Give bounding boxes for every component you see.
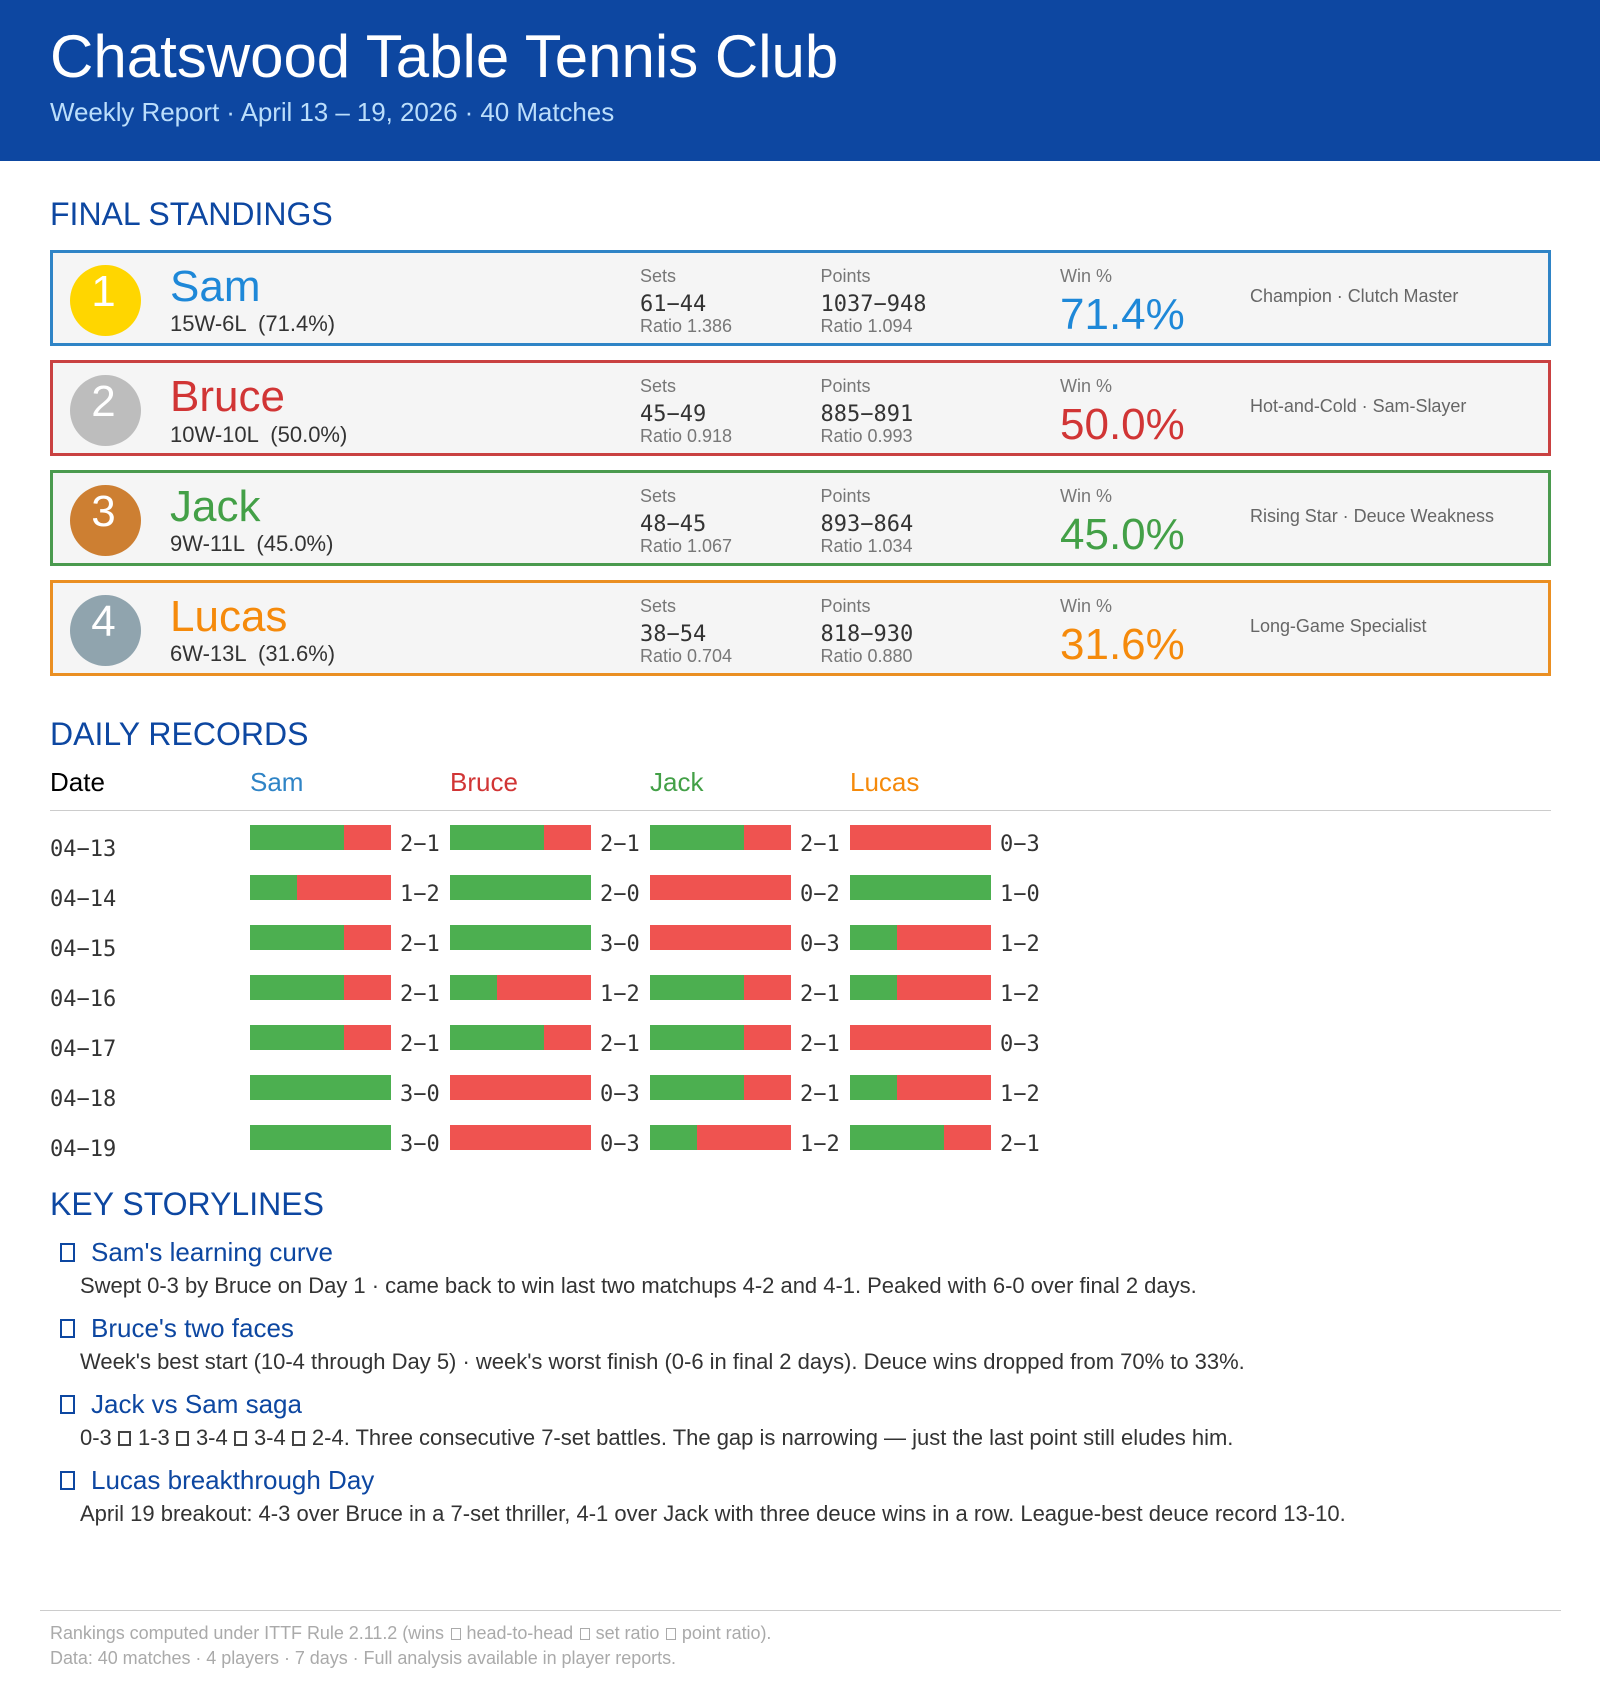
icon: rank 2 medal: 2 [91, 376, 116, 426]
sets stat: Sets [640, 376, 676, 396]
row 04-13: 2−1 [400, 832, 440, 857]
sets stat: Sets [640, 266, 676, 286]
table header: Bruce [450, 767, 518, 797]
panel: Sam standing card [50, 250, 1551, 346]
icon: rank 2 medal [70, 375, 141, 446]
row 04-16: 2−1 [800, 982, 840, 1007]
row 04-15: 2−1 [400, 932, 440, 957]
row 04-16 [50, 975, 1040, 1012]
panel: Jack standing card [50, 470, 1551, 566]
panel: Sam standing card: Ratio 1.386 [640, 316, 732, 336]
tagline: Hot-and-Cold · Sam-Slayer [1250, 396, 1466, 416]
row 04-16: 1−2 [1000, 982, 1040, 1007]
panel: Bruce standing card: 45−49 [640, 402, 706, 427]
heading: daily records: DAILY RECORDS [50, 716, 308, 752]
panel: Jack standing card: Ratio 1.034 [820, 536, 913, 556]
row 04-13: 2−1 [600, 832, 640, 857]
storyline: Lucas breakthrough Day: April 19 breakout: 4-3 over Bruce in a 7-set thriller, 4-1 over Jack with three deuce wins in a row. League-best deuce record 13-10. [80, 1501, 1346, 1526]
panel: Jack standing card: 48−45 [640, 512, 706, 537]
win percent: Win % [1060, 596, 1112, 616]
tagline: Champion · Clutch Master [1250, 286, 1458, 306]
heading: key storylines: KEY STORYLINES [50, 1186, 324, 1222]
storyline: Bruce's two faces: Bruce's two faces [91, 1313, 294, 1343]
footer: Data: 40 matches · 4 players · 7 days · Full analysis available in player reports. [50, 1648, 676, 1668]
footer [40, 1610, 1561, 1681]
row 04-14: 1−2 [400, 882, 440, 907]
row 04-15: 3−0 [600, 932, 640, 957]
table header: Jack [650, 767, 703, 797]
row 04-17: 0−3 [1000, 1032, 1040, 1057]
row 04-14: 2−0 [600, 882, 640, 907]
panel: Lucas standing card: Ratio 0.704 [640, 646, 732, 666]
row 04-14: 1−0 [1000, 882, 1040, 907]
row 04-18: 2−1 [800, 1082, 840, 1107]
player name: Sam [170, 262, 260, 311]
panel: Bruce standing card [50, 360, 1551, 456]
storyline: Sam's learning curve: Swept 0-3 by Bruce on Day 1 · came back to win last two matchups 4-2 and 4-1. Peaked with 6-0 over final 2 days. [80, 1273, 1197, 1298]
footer: Rankings computed under ITTF Rule 2.11.2 (wins head-to-head set ratio point ratio). [50, 1623, 771, 1643]
table header [50, 767, 1551, 811]
icon: rank 1 medal: 1 [91, 266, 116, 316]
row 04-18: 1−2 [1000, 1082, 1040, 1107]
panel: Lucas standing card: 38−54 [640, 622, 706, 647]
row 04-14: 04−14 [50, 887, 116, 912]
record: 6W-13L (31.6%) [170, 641, 335, 666]
panel: Sam standing card: 71.4% [1060, 290, 1185, 339]
record: 9W-11L (45.0%) [170, 531, 333, 556]
row 04-13: 2−1 [800, 832, 840, 857]
win percent: Win % [1060, 376, 1112, 396]
row 04-18 [50, 1075, 1040, 1112]
table header: Lucas [850, 767, 919, 797]
row 04-17: 2−1 [600, 1032, 640, 1057]
storyline: Jack vs Sam saga: 0-3 1-3 3-4 3-4 2-4. Three consecutive 7-set battles. The gap is narrowing — just the last point still eludes him. [80, 1425, 1233, 1450]
panel: Bruce standing card: Ratio 0.993 [820, 426, 913, 446]
title: Chatswood Table Tennis Club [50, 23, 838, 90]
panel: Sam standing card: Ratio 1.094 [820, 316, 913, 336]
row 04-18: 3−0 [400, 1082, 440, 1107]
row 04-19: 1−2 [800, 1132, 840, 1157]
player name: Lucas [170, 592, 287, 641]
storyline: Sam's learning curve: Sam's learning curve [91, 1237, 333, 1267]
chart: daily records bars [50, 825, 1040, 1162]
row 04-17: 04−17 [50, 1037, 116, 1062]
row 04-14: 0−2 [800, 882, 840, 907]
points stat: Points [820, 596, 871, 616]
icon: rank 4 medal: 4 [91, 596, 116, 646]
icon: rank 3 medal: 3 [91, 486, 116, 536]
points stat: Points [820, 486, 871, 506]
record: 15W-6L (71.4%) [170, 311, 335, 336]
row 04-13: 0−3 [1000, 832, 1040, 857]
win percent: Win % [1060, 266, 1112, 286]
row 04-19: 3−0 [400, 1132, 440, 1157]
row 04-16: 1−2 [600, 982, 640, 1007]
icon: rank 3 medal [70, 485, 141, 556]
points stat: Points [820, 376, 871, 396]
row 04-19: 0−3 [600, 1132, 640, 1157]
row 04-16: 2−1 [400, 982, 440, 1007]
row 04-19 [50, 1125, 1040, 1162]
win percent: Win % [1060, 486, 1112, 506]
storyline: Sam's learning curve [60, 1237, 1197, 1298]
panel: Lucas standing card: 31.6% [1060, 620, 1185, 669]
storyline: Bruce's two faces: Week's best start (10-4 through Day 5) · week's worst finish (0-6 in final 2 days). Deuce wins dropped from 70% to 33%. [80, 1349, 1245, 1374]
row 04-14 [50, 875, 1040, 912]
panel: Sam standing card: 61−44 [640, 292, 706, 317]
row 04-17: 2−1 [800, 1032, 840, 1057]
panel: Sam standing card: 1037−948 [820, 292, 926, 317]
player name: Bruce [170, 372, 285, 421]
storyline: Lucas breakthrough Day: Lucas breakthrough Day [91, 1465, 374, 1495]
row 04-17: 2−1 [400, 1032, 440, 1057]
row 04-16: 04−16 [50, 987, 116, 1012]
header banner [0, 0, 1600, 161]
panel: Lucas standing card: Ratio 0.880 [820, 646, 913, 666]
player name: Jack [170, 482, 260, 531]
sets stat: Sets [640, 486, 676, 506]
panel: Jack standing card: Ratio 1.067 [640, 536, 732, 556]
storyline: Jack vs Sam saga [60, 1389, 1233, 1450]
icon: rank 1 medal [70, 265, 141, 336]
panel: Jack standing card: 893−864 [820, 512, 913, 537]
row 04-15: 04−15 [50, 937, 116, 962]
record: 10W-10L (50.0%) [170, 422, 347, 447]
row 04-15: 0−3 [800, 932, 840, 957]
row 04-13: 04−13 [50, 837, 116, 862]
panel: Bruce standing card: 50.0% [1060, 400, 1185, 449]
tagline: Long-Game Specialist [1250, 616, 1426, 636]
panel: Bruce standing card: 885−891 [820, 402, 913, 427]
row 04-19: 2−1 [1000, 1132, 1040, 1157]
heading: final standings: FINAL STANDINGS [50, 196, 333, 232]
table header: Date [50, 767, 105, 797]
panel: Lucas standing card [50, 580, 1551, 676]
points stat: Points [820, 266, 871, 286]
panel: Bruce standing card: Ratio 0.918 [640, 426, 732, 446]
row 04-15 [50, 925, 1040, 962]
storyline: Bruce's two faces [60, 1313, 1245, 1374]
row 04-18: 04−18 [50, 1087, 116, 1112]
row 04-17 [50, 1025, 1040, 1062]
subtitle: Weekly Report · April 13 – 19, 2026 · 40 Matches [50, 97, 614, 127]
panel: Jack standing card: 45.0% [1060, 510, 1185, 559]
icon: rank 4 medal [70, 595, 141, 666]
panel: Lucas standing card: 818−930 [820, 622, 913, 647]
sets stat: Sets [640, 596, 676, 616]
tagline: Rising Star · Deuce Weakness [1250, 506, 1494, 526]
table header: Sam [250, 767, 303, 797]
storyline: Lucas breakthrough Day [60, 1465, 1346, 1526]
row 04-15: 1−2 [1000, 932, 1040, 957]
row 04-13 [50, 825, 1040, 862]
storyline: Jack vs Sam saga: Jack vs Sam saga [91, 1389, 302, 1419]
row 04-19: 04−19 [50, 1137, 116, 1162]
row 04-18: 0−3 [600, 1082, 640, 1107]
